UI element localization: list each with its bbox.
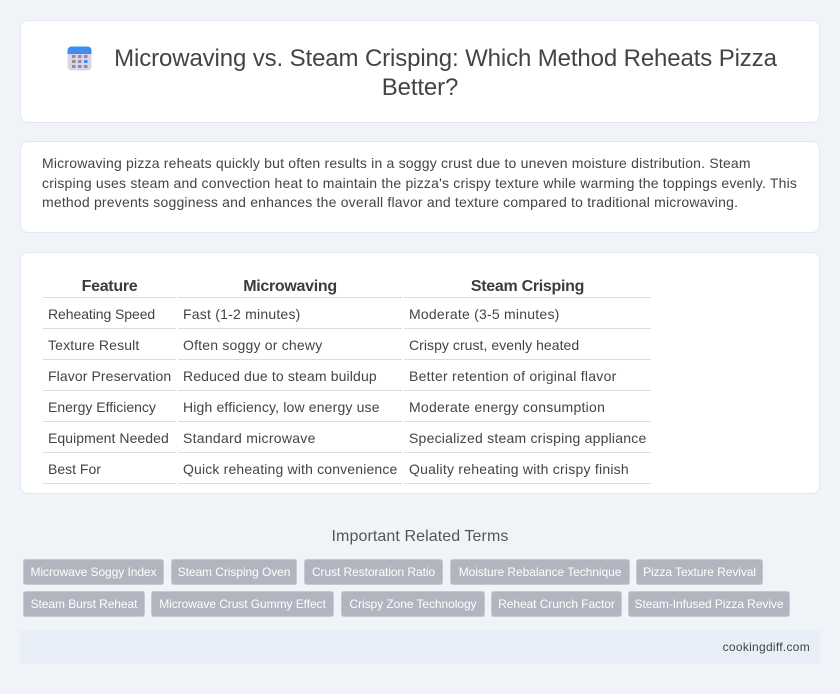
related term tags bbox=[23, 559, 790, 617]
header panel bbox=[20, 20, 820, 123]
comparison table bbox=[43, 278, 651, 484]
table rows: Moderate (3-5 minutes) bbox=[409, 306, 560, 322]
table header row: Steam Crisping bbox=[471, 278, 584, 295]
table rows: High efficiency, low energy use bbox=[183, 399, 380, 415]
intro paragraph: Microwaving pizza reheats quickly but often results in a soggy crust due to uneven moisture distribution. Steam bbox=[42, 155, 751, 171]
related term tags: Moisture Rebalance Technique bbox=[459, 565, 621, 579]
intro text panel bbox=[20, 141, 820, 233]
related term tags: Steam-Infused Pizza Revive bbox=[635, 597, 783, 611]
table rows: Best For bbox=[48, 461, 101, 477]
icon: calendar grid bbox=[68, 46, 92, 70]
table rows: Fast (1-2 minutes) bbox=[183, 306, 301, 322]
related term tags: Steam Crisping Oven bbox=[178, 565, 290, 579]
table header row: Microwaving bbox=[243, 278, 337, 295]
table rows: Texture Result bbox=[48, 337, 139, 353]
related term tags: Microwave Soggy Index bbox=[31, 565, 156, 579]
intro paragraph: crisping uses steam and convection heat to maintain the pizza's crispy texture while warming the toppings evenly. This bbox=[42, 175, 797, 191]
table header row: Feature bbox=[82, 278, 137, 295]
table rows: Quality reheating with crispy finish bbox=[409, 461, 629, 477]
table rows: Reheating Speed bbox=[48, 306, 155, 322]
related term tags: Microwave Crust Gummy Effect bbox=[159, 597, 326, 611]
table rows: Specialized steam crisping appliance bbox=[409, 430, 646, 446]
table rows: Equipment Needed bbox=[48, 430, 169, 446]
title: Better? bbox=[382, 74, 458, 101]
related term tags: Pizza Texture Revival bbox=[643, 565, 756, 579]
related term tags: Crispy Zone Technology bbox=[350, 597, 476, 611]
table rows: Standard microwave bbox=[183, 430, 316, 446]
table rows: Energy Efficiency bbox=[48, 399, 156, 415]
table rows: Moderate energy consumption bbox=[409, 399, 605, 415]
table rows: Crispy crust, evenly heated bbox=[409, 337, 579, 353]
comparison table panel bbox=[20, 252, 820, 494]
table rows: Better retention of original flavor bbox=[409, 368, 617, 384]
intro paragraph: method prevents sogginess and enhances the overall flavor and texture compared to traditional microwaving. bbox=[42, 194, 738, 210]
title bbox=[114, 45, 777, 101]
related term tags: Crust Restoration Ratio bbox=[312, 565, 435, 579]
footer bar bbox=[20, 630, 820, 664]
intro paragraph bbox=[42, 155, 797, 210]
related term tags: Steam Burst Reheat bbox=[31, 597, 137, 611]
table rows: Reduced due to steam buildup bbox=[183, 368, 377, 384]
related term tags: Reheat Crunch Factor bbox=[498, 597, 615, 611]
table rows: Flavor Preservation bbox=[48, 368, 171, 384]
table rows: Quick reheating with convenience bbox=[183, 461, 397, 477]
table rows bbox=[43, 297, 651, 484]
title: Microwaving vs. Steam Crisping: Which Method Reheats Pizza bbox=[114, 45, 777, 72]
footer source: cookingdiff.com bbox=[723, 640, 810, 654]
table header row bbox=[82, 278, 584, 295]
table rows: Often soggy or chewy bbox=[183, 337, 322, 353]
related terms heading: Important Related Terms bbox=[332, 528, 508, 545]
